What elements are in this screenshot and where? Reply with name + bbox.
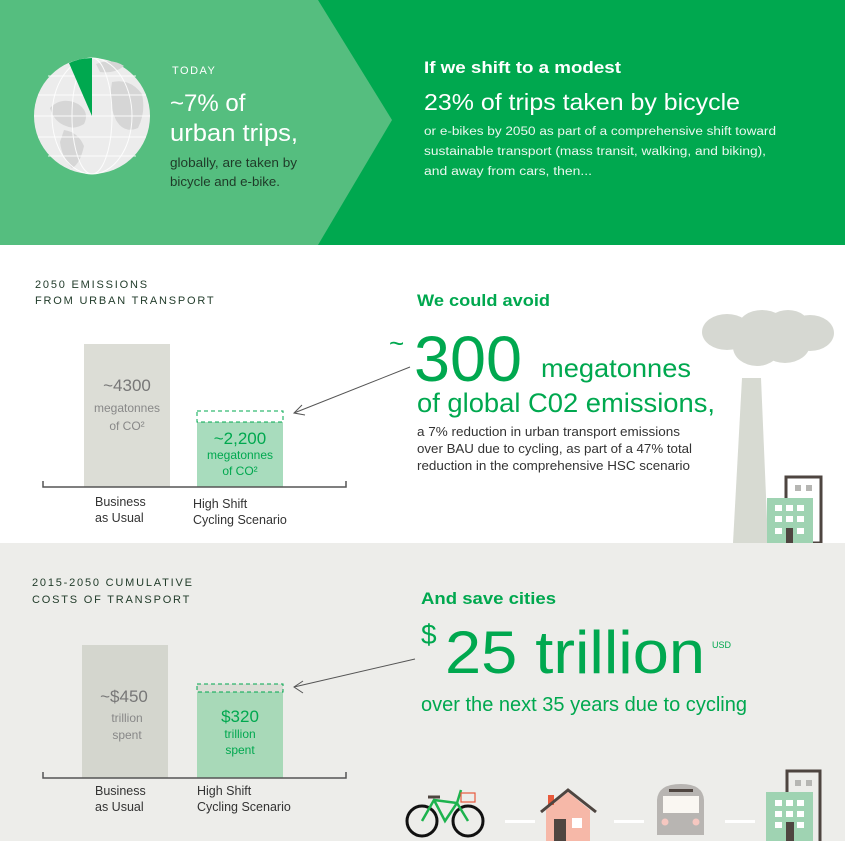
bar chart: emissions xyxy=(43,344,346,527)
panel: emissions xyxy=(0,245,845,543)
arrow: emissions xyxy=(294,367,410,415)
text: today stat xyxy=(170,65,298,189)
bar chart: costs: as Usual xyxy=(95,800,144,814)
bar chart: costs: Business xyxy=(95,784,146,798)
text: shift scenario: 23% of trips taken by bicycle xyxy=(424,89,740,115)
text: shift scenario: If we shift to a modest xyxy=(424,58,621,77)
bar chart: emissions: High Shift xyxy=(193,497,247,511)
text: avoid emissions: a 7% reduction in urban transport emissions xyxy=(417,425,680,439)
bar chart: costs: trillion xyxy=(224,727,256,741)
text: avoid emissions: ~ xyxy=(389,328,404,358)
text: save cities: USD xyxy=(712,640,732,650)
icon: house xyxy=(541,790,596,841)
text: save cities: And save cities xyxy=(421,589,556,608)
bar chart: costs: $320 xyxy=(221,707,259,726)
text: shift scenario: or e-bikes by 2050 as part of a comprehensive shift toward xyxy=(424,126,776,138)
bar chart: emissions: of CO² xyxy=(222,464,258,478)
bar chart: emissions: ~2,200 xyxy=(214,429,266,448)
bar chart: costs: spent xyxy=(225,743,255,757)
text: avoid emissions xyxy=(389,291,715,473)
text: today stat: TODAY xyxy=(172,65,216,77)
text: save cities: 25 trillion xyxy=(445,619,705,686)
text: shift scenario: sustainable transport (mass transit, walking, and biking), xyxy=(424,146,766,158)
bar chart: emissions: Business xyxy=(95,495,146,509)
text: avoid emissions: megatonnes xyxy=(541,353,691,383)
text: today stat: globally, are taken by xyxy=(170,156,298,170)
bar chart: emissions: megatonnes xyxy=(207,448,273,462)
bar chart: emissions: of CO² xyxy=(109,419,145,433)
text: save cities: $ xyxy=(421,619,437,650)
bar chart: emissions: ~4300 xyxy=(103,376,151,395)
text: avoid emissions: over BAU due to cycling, as part of a 47% total xyxy=(417,442,692,456)
icon: bicycle xyxy=(407,790,483,836)
text: save cities: over the next 35 years due to cycling xyxy=(421,694,747,716)
text: avoid emissions: reduction in the comprehensive HSC scenario xyxy=(417,459,690,473)
panel: costs xyxy=(0,543,845,841)
text: avoid emissions: We could avoid xyxy=(417,291,550,310)
text: avoid emissions: of global C02 emissions, xyxy=(417,388,715,418)
bar chart: costs: ~$450 xyxy=(100,687,148,706)
text: today stat: ~7% of xyxy=(170,90,246,117)
heading: emissions: FROM URBAN TRANSPORT xyxy=(35,295,215,307)
heading: costs: COSTS OF TRANSPORT xyxy=(32,594,191,606)
icon: globe with pie slice xyxy=(34,58,150,174)
heading: emissions: 2050 EMISSIONS xyxy=(35,279,149,291)
bar chart: costs: Cycling Scenario xyxy=(197,800,291,814)
icon: factory and building xyxy=(702,310,834,543)
arrow: costs xyxy=(294,659,415,693)
text: avoid emissions: 300 xyxy=(414,323,522,395)
text: today stat: bicycle and e-bike. xyxy=(170,175,280,189)
bar chart: costs: trillion xyxy=(111,711,143,725)
icon: office building xyxy=(766,771,820,841)
bar chart: costs: spent xyxy=(112,728,142,742)
heading: costs: 2015-2050 CUMULATIVE xyxy=(32,577,194,589)
text: save cities xyxy=(421,589,747,716)
text: shift scenario: and away from cars, then... xyxy=(424,166,592,178)
bar chart: emissions: megatonnes xyxy=(94,401,160,415)
text: shift scenario xyxy=(424,58,776,178)
panel: top banner xyxy=(0,0,845,245)
bar chart: costs xyxy=(43,645,346,814)
icon: bus xyxy=(657,784,704,835)
bar chart: costs: High Shift xyxy=(197,784,251,798)
bar chart: emissions: as Usual xyxy=(95,511,144,525)
text: today stat: urban trips, xyxy=(170,120,298,147)
bar chart: emissions: Cycling Scenario xyxy=(193,513,287,527)
